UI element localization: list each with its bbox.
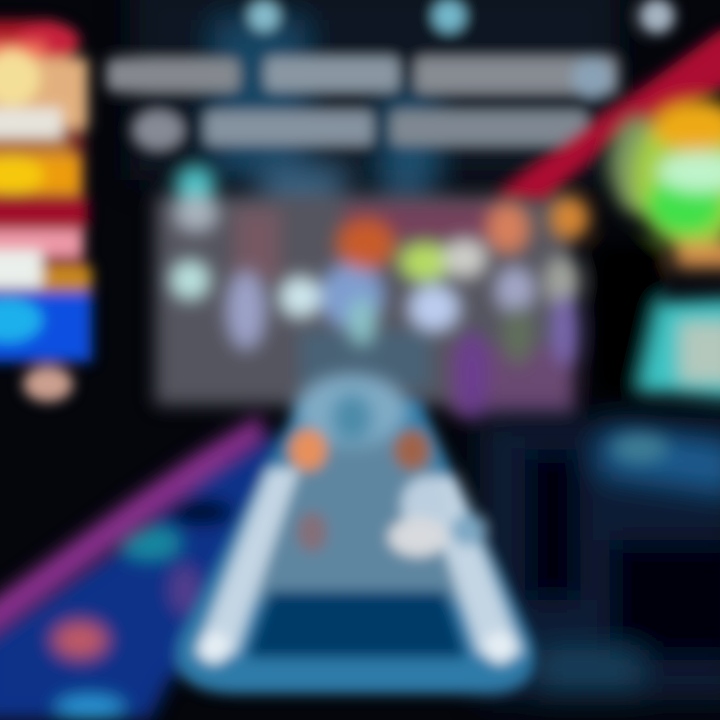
- runway orange markers: [289, 429, 430, 552]
- wall lights and figures: [170, 166, 590, 420]
- central wall panel: [155, 195, 575, 415]
- runway outer rim: [176, 400, 533, 694]
- runway table: [176, 374, 533, 694]
- floor, lower left: [0, 430, 280, 720]
- background: ceiling and rear wall: [130, 0, 620, 250]
- ceiling lights: [248, 0, 675, 34]
- runway dome centre: [332, 394, 372, 442]
- right console highlight: [612, 434, 668, 462]
- right console: [480, 420, 720, 700]
- runway dome: [296, 374, 408, 446]
- title block: [106, 56, 618, 150]
- runway mat: [245, 430, 475, 600]
- purple floor stripe: [0, 415, 264, 645]
- runway white rails: [194, 468, 524, 664]
- left arcade cabinet: [0, 20, 92, 402]
- right arcade cabinet: [595, 99, 720, 400]
- runway inner dark panel: [247, 592, 466, 657]
- red ribbon, top right: [495, 30, 720, 200]
